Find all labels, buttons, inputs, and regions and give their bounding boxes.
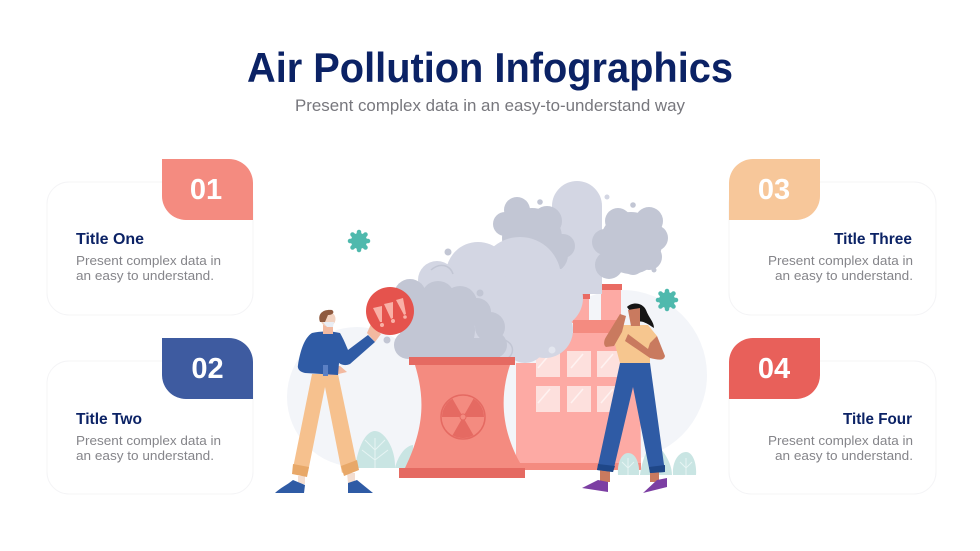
text block: card 03 body: an easy to understand. (775, 268, 913, 283)
legs (600, 470, 659, 482)
trousers (597, 363, 665, 473)
icon: virus right (658, 291, 676, 309)
icon: virus left (350, 232, 368, 250)
trousers (293, 374, 357, 473)
torso and arm (298, 332, 375, 375)
icon: warning badge (366, 287, 414, 335)
illustration: air pollution scene (275, 181, 707, 493)
text block: card 01 body: an easy to understand. (76, 268, 214, 283)
number 03: 03 (758, 174, 790, 206)
figure: woman coughing (582, 304, 667, 493)
factory (516, 284, 641, 470)
cuff (323, 365, 328, 376)
number 02: 02 (191, 353, 224, 385)
heading: title three: Title Three (834, 231, 912, 248)
text block: card 01 body: Present complex data in (76, 253, 221, 268)
icon: radiation symbol (441, 395, 485, 439)
plants left (355, 431, 413, 468)
hair (627, 304, 654, 328)
head (323, 320, 333, 334)
title: Air Pollution Infographics (247, 44, 733, 91)
heading: title four: Title Four (843, 411, 912, 428)
smoke front large (384, 237, 583, 363)
badge 02 (162, 338, 253, 399)
badge 01 (162, 159, 253, 220)
plants right (618, 443, 696, 475)
subtitle: Present complex data in an easy-to-understand way (295, 97, 686, 115)
panel: card 02 (47, 338, 253, 494)
text block: card 04 body: an easy to understand. (775, 448, 913, 463)
text block: card 02 body: Present complex data in (76, 433, 221, 448)
legs (298, 473, 355, 484)
badge 04 (729, 338, 820, 399)
heading: title one: Title One (76, 231, 144, 248)
torso (613, 325, 657, 363)
shoes (582, 478, 667, 493)
smoke back (493, 181, 668, 294)
figure: man with warning sign (275, 310, 381, 493)
cooling tower (399, 357, 525, 478)
background blob (287, 290, 707, 467)
number 04: 04 (758, 353, 790, 385)
text block: card 04 body: Present complex data in (768, 433, 913, 448)
text block: card 03 body: Present complex data in (768, 253, 913, 268)
heading: title two: Title Two (76, 411, 142, 428)
factory windows (536, 351, 621, 412)
arms (604, 314, 626, 347)
panel: card 04 (729, 338, 936, 494)
badge 03 (729, 159, 820, 220)
text block: card 02 body: an easy to understand. (76, 448, 214, 463)
panel: card 01 (47, 159, 253, 315)
panel: card 03 (729, 159, 936, 315)
hands (328, 324, 381, 376)
number 01: 01 (190, 174, 222, 206)
head (628, 308, 640, 326)
shoes (275, 480, 373, 493)
